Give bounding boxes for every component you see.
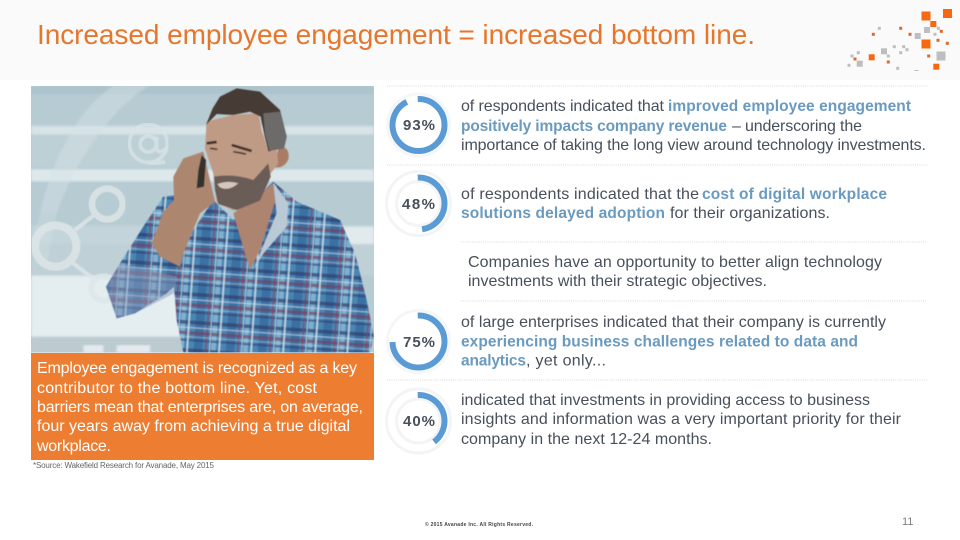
donut: 40% [386, 389, 450, 453]
donut: 48% [386, 172, 450, 236]
stat text: 93%: importance of taking the long view around technology investments. [461, 137, 926, 154]
stat text: 40% [461, 392, 902, 448]
page number: 11 [902, 516, 913, 528]
stat text: 93%: of respondents indicated that [461, 98, 665, 115]
hair [206, 88, 287, 152]
stat text: 48%: solutions delayed adoption [461, 205, 665, 222]
stat text: 93%: – underscoring the [732, 118, 862, 135]
at sign watermark [129, 124, 167, 163]
logo: scattered squares [848, 9, 952, 71]
photo: man on the phone [31, 86, 374, 353]
stat text: 48%: for their organizations. [670, 205, 830, 222]
source note: *Source: Wakefield Research for Avanade, May 2015 [33, 461, 215, 470]
donut: 48%: 48% [402, 196, 435, 213]
statement: companies opportunity: investments with their strategic objectives. [468, 273, 767, 290]
donut: 93%: 93% [403, 117, 435, 134]
stat text: 93%: improved employee engagement [668, 98, 911, 115]
forearm and hand [152, 152, 215, 267]
stat text: 48% [461, 186, 887, 222]
stat text: 40%: company in the next 12-24 months. [461, 431, 712, 448]
ear [275, 148, 289, 167]
stat text: 93% [461, 98, 926, 154]
callout: orange summary box [31, 353, 374, 460]
shirt [106, 182, 374, 353]
callout: orange summary box: barriers mean that enterprises are, on average, [37, 399, 363, 416]
donut: 40%: 40% [403, 413, 435, 430]
stat text: 75%: of large enterprises indicated that their company is currently [461, 314, 886, 331]
donut: 75%: 75% [403, 334, 435, 351]
stat text: 48%: cost of digital workplace [702, 186, 887, 203]
statement: companies opportunity [468, 254, 882, 290]
statement: companies opportunity: Companies have an opportunity to better align technology [468, 254, 882, 271]
copyright footer: © 2015 Avanade Inc. All Rights Reserved. [425, 521, 534, 528]
callout: orange summary box: four years away from achieving a true digital [37, 418, 350, 435]
network watermark [32, 185, 126, 276]
face [205, 113, 278, 211]
callout: orange summary box: contributor to the bottom line. Yet, cost [37, 380, 318, 397]
stat text: 40%: insights and information was a very important priority for their [461, 411, 902, 428]
callout: orange summary box: workplace. [36, 438, 111, 455]
donut: 93% [388, 94, 450, 156]
header band [0, 0, 960, 80]
title: Increased employee engagement = increased bottom line. [37, 19, 755, 50]
stat text: 93%: positively impacts company revenue [461, 118, 727, 135]
donut: 75% [388, 310, 450, 372]
stat text: 75%: analytics [461, 352, 526, 370]
stat text: 75%: experiencing business challenges related to data and [461, 334, 858, 350]
stat text: 75% [461, 314, 886, 370]
stat text: 40%: indicated that investments in providing access to business [461, 392, 870, 409]
callout: orange summary box: Employee engagement is recognized as a key [37, 360, 357, 377]
stat text: 48%: of respondents indicated that the [461, 186, 699, 203]
stat text: 75%: , yet only... [526, 352, 606, 370]
